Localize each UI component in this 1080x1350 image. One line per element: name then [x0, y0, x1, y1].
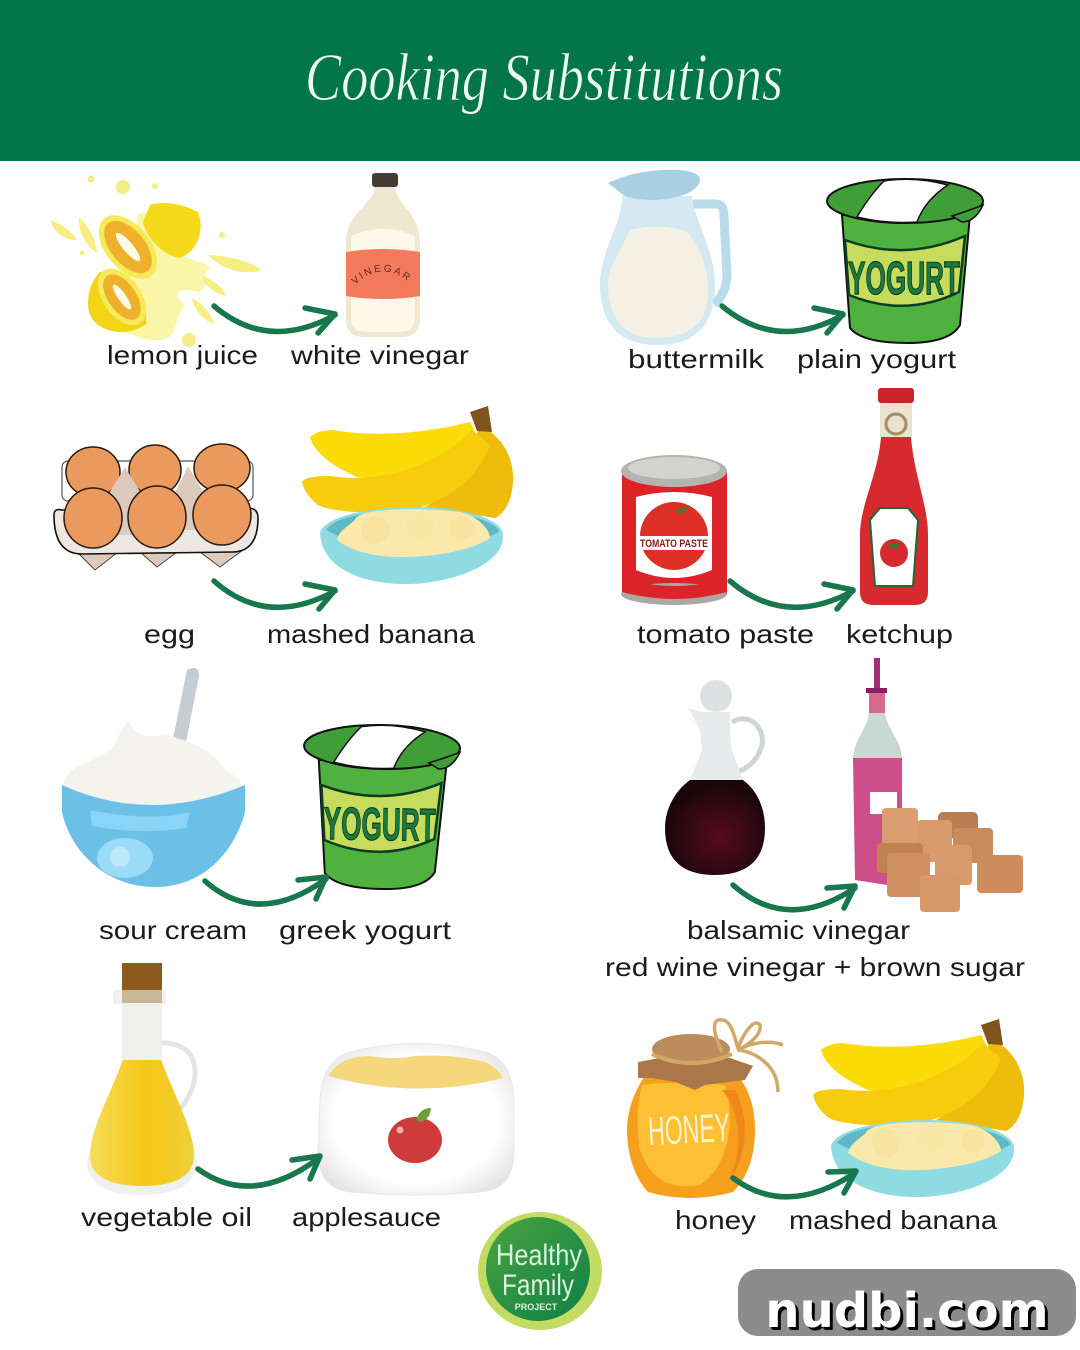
icon: plain yogurt cup — [827, 179, 983, 343]
arrow — [730, 581, 853, 609]
label: lemon juice: lemon juice — [107, 340, 258, 370]
label: sour cream: sour cream — [99, 915, 247, 945]
pair: balsamic vinegar to red wine vinegar and brown sugar — [605, 658, 1025, 982]
arrow — [198, 1156, 320, 1186]
label: greek yogurt: greek yogurt — [279, 915, 452, 945]
arrow — [733, 885, 855, 910]
pair: tomato paste to ketchup — [621, 388, 953, 649]
icon: tomato paste can — [621, 455, 727, 605]
logo: Healthy Family Project: Healthy — [496, 1239, 582, 1272]
label: tomato paste: tomato paste — [637, 619, 814, 649]
icon: buttermilk jug — [600, 170, 727, 345]
icon: ketchup bottle — [860, 388, 928, 605]
label: egg: egg — [144, 619, 195, 649]
label: mashed banana: mashed banana — [789, 1205, 998, 1235]
label: applesauce: applesauce — [292, 1202, 441, 1232]
arrow — [214, 306, 335, 333]
label: vegetable oil: vegetable oil — [81, 1202, 252, 1232]
label: balsamic vinegar: balsamic vinegar — [687, 915, 910, 945]
icon: honey jar: HONEY — [647, 1106, 731, 1154]
watermark badge — [738, 1269, 1076, 1336]
icon: lemon juice — [50, 176, 262, 347]
icon: greek yogurt cup: YOGURT — [323, 797, 436, 851]
icon: vegetable oil bottle — [87, 963, 197, 1195]
icon: sour cream bowl — [62, 668, 245, 887]
label: honey: honey — [675, 1205, 756, 1235]
icon: plain yogurt cup: YOGURT — [848, 252, 960, 304]
title: Cooking Substitutions — [305, 39, 783, 115]
label: red wine vinegar + brown sugar: red wine vinegar + brown sugar — [605, 952, 1025, 982]
label: buttermilk: buttermilk — [628, 344, 765, 374]
icon: brown sugar cubes — [877, 808, 1023, 912]
pair: sour cream to greek yogurt — [62, 668, 460, 945]
arrow — [733, 1171, 856, 1197]
icon: tomato paste can: TOMATO PASTE — [640, 538, 708, 550]
logo: Healthy Family Project: Family — [502, 1269, 574, 1302]
logo: Healthy Family Project: PROJECT — [515, 1302, 558, 1312]
icon: greek yogurt cup — [302, 724, 460, 890]
icon: applesauce bowl — [318, 1044, 514, 1195]
icon: egg carton — [54, 444, 258, 570]
arrow — [214, 581, 335, 609]
pair: lemon juice to white vinegar — [50, 173, 469, 370]
pair: honey to mashed banana — [627, 1019, 1024, 1235]
icon: mashed banana — [302, 406, 513, 584]
arrow — [205, 877, 326, 904]
arrow — [722, 306, 843, 333]
pair: vegetable oil to applesauce — [81, 963, 514, 1232]
label: white vinegar: white vinegar — [290, 340, 469, 370]
icon: red wine vinegar bottle — [853, 658, 902, 885]
label: ketchup: ketchup — [846, 619, 953, 649]
pair: egg to mashed banana — [54, 406, 513, 649]
label: mashed banana: mashed banana — [267, 619, 476, 649]
label: plain yogurt: plain yogurt — [797, 344, 957, 374]
icon: white vinegar bottle — [346, 173, 420, 337]
pair: buttermilk to plain yogurt — [600, 170, 983, 374]
icon: mashed banana — [813, 1019, 1024, 1197]
icon: balsamic bottle — [665, 680, 765, 875]
icon: white vinegar bottle: VINEGAR — [350, 264, 410, 283]
header banner — [0, 0, 1080, 161]
icon: honey jar — [627, 1020, 783, 1198]
logo: Healthy Family Project — [478, 1212, 602, 1330]
